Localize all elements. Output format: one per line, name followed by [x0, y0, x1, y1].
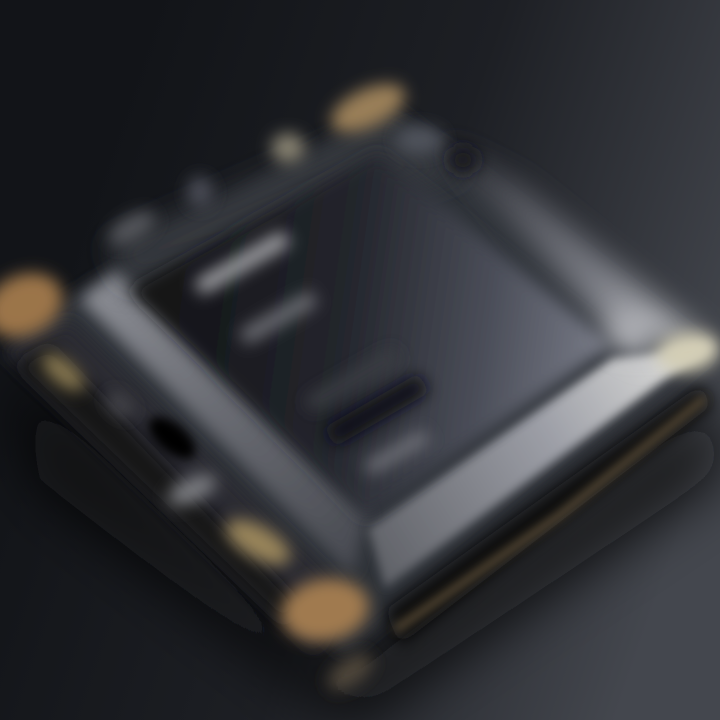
gold corner: top: [324, 74, 412, 142]
chip blue-gray: [187, 176, 213, 208]
lower-left strip: [0, 320, 345, 650]
silver lower-right frame band: [368, 345, 712, 588]
top edge chips: [103, 126, 478, 251]
text line 2: [238, 290, 319, 346]
chip dark: [448, 146, 478, 174]
text line 3: [303, 347, 402, 413]
left frame band: [80, 268, 368, 575]
dark lower-right edge: [385, 385, 712, 645]
strip gray chip 2: [163, 468, 221, 512]
top frame band: [105, 125, 470, 285]
strip gray chip: [102, 388, 138, 422]
chip gray: [103, 205, 161, 251]
text line 5: [363, 429, 431, 476]
screen: [128, 152, 612, 518]
chip pale: [271, 133, 305, 163]
card shadow: [10, 370, 720, 720]
strip gold chip: [35, 346, 91, 398]
gold corner: bottom: [276, 572, 374, 648]
screen highlight: [603, 311, 657, 359]
text line 4 dark: [324, 373, 430, 447]
gold edge line: [395, 398, 705, 630]
strip gold chip 2: [219, 510, 297, 574]
chip slate: [396, 126, 444, 154]
strip dark gap: [15, 345, 300, 625]
pale corner: right: [653, 327, 720, 377]
screen text lines: [193, 230, 431, 476]
card body: [5, 105, 712, 655]
gold corner: bottom tip: [321, 646, 379, 698]
gold corner: left: [0, 261, 73, 349]
strip black chip: [142, 409, 202, 467]
text line 1: [193, 230, 292, 296]
right frame band: [440, 140, 705, 345]
